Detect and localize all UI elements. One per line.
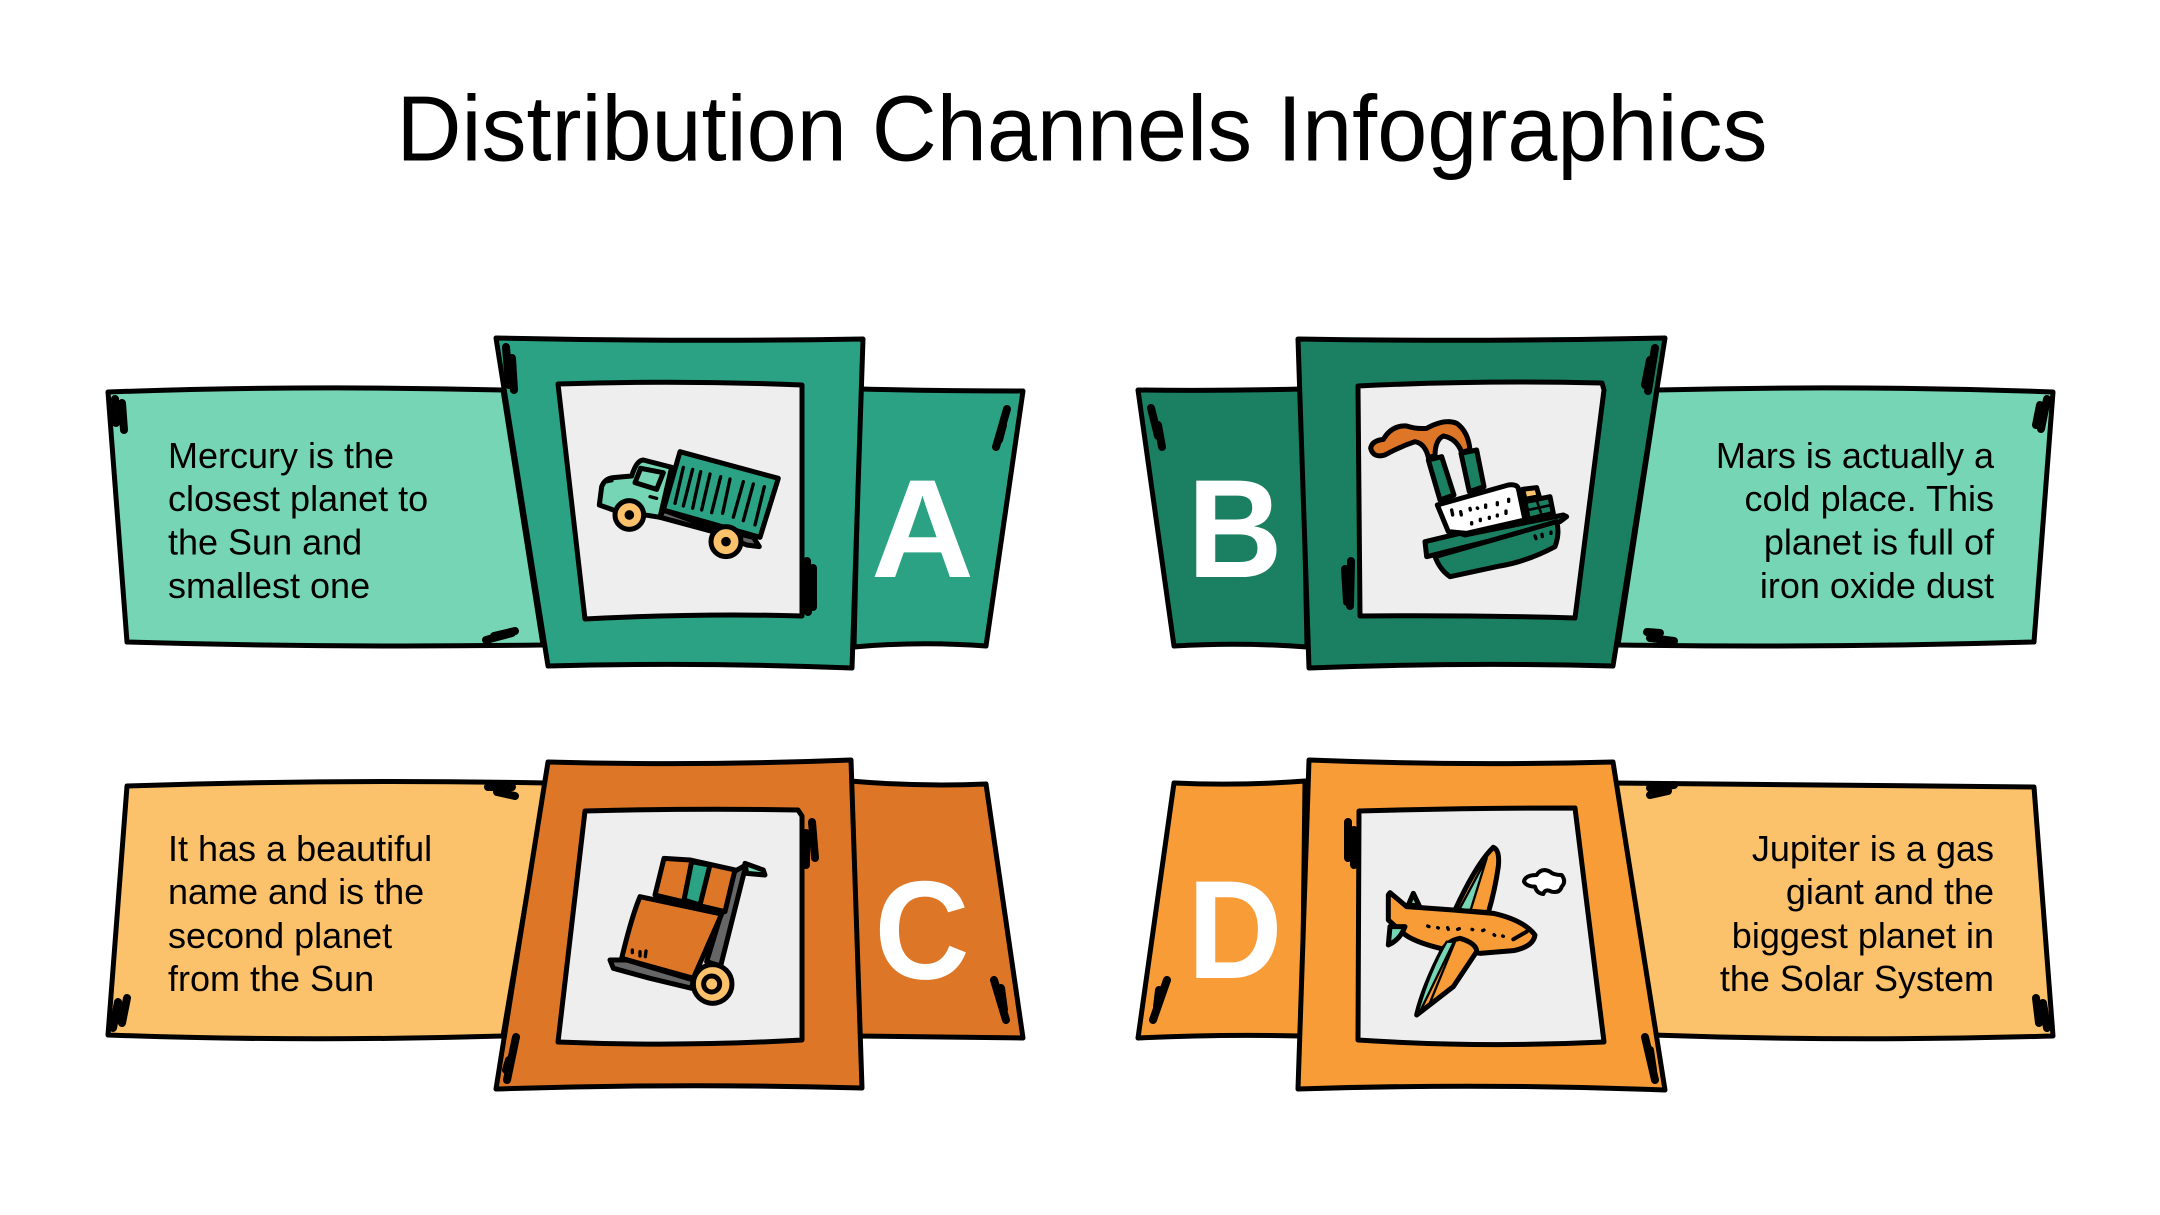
text panel B background [1618,388,2053,646]
image frame B [1298,338,1665,668]
text D: biggest planet in [1732,915,1994,956]
panel: C [108,760,1023,1089]
text A: closest planet to [168,478,428,519]
text C: name and is the [168,871,424,912]
letter B: B [1188,450,1282,607]
corner scribbles A [115,347,1007,640]
icon: truck [599,452,778,557]
title: Distribution Channels Infographics [396,76,1768,180]
letter D: D [1188,851,1282,1008]
letter tab B [1138,389,1307,647]
image card A [558,382,802,619]
text panel D background [1612,783,2053,1039]
image card C [558,809,802,1044]
text panel A background [108,388,543,646]
text D: Jupiter is a gas [1752,828,1994,869]
text B: iron oxide dust [1760,565,1994,606]
text D: giant and the [1786,871,1994,912]
letter tab C [850,781,1023,1038]
letter C: C [874,852,970,1008]
text B: cold place. This [1745,478,1994,519]
icon: ship [1371,422,1567,577]
image frame C [496,760,862,1089]
image frame A [496,338,863,668]
icon: hand truck [610,858,765,1003]
panel: A [108,338,1023,668]
image card D [1358,808,1604,1045]
letter tab D [1138,781,1305,1038]
text C: It has a beautiful [168,828,432,869]
letter A: A [871,450,974,607]
text A: the Sun and [168,522,362,562]
text C: second planet [168,915,392,956]
text A: smallest one [168,565,370,606]
image card B [1358,382,1604,618]
icon: airplane [1388,847,1564,1015]
corner scribbles B [1151,348,2047,641]
text B: planet is full of [1764,522,1995,562]
text panel C background [108,782,546,1039]
text D: the Solar System [1720,958,1994,999]
panel: B [1138,338,2053,668]
image frame D [1298,760,1665,1090]
text A: Mercury is the [168,435,394,476]
corner scribbles C [113,787,1006,1080]
panel: D [1138,760,2053,1090]
text D [1720,828,1994,999]
corner scribbles D [1153,785,2047,1080]
text B [1716,435,1995,606]
letter tab A [854,389,1023,647]
text C: from the Sun [168,958,374,999]
text B: Mars is actually a [1716,435,1995,476]
